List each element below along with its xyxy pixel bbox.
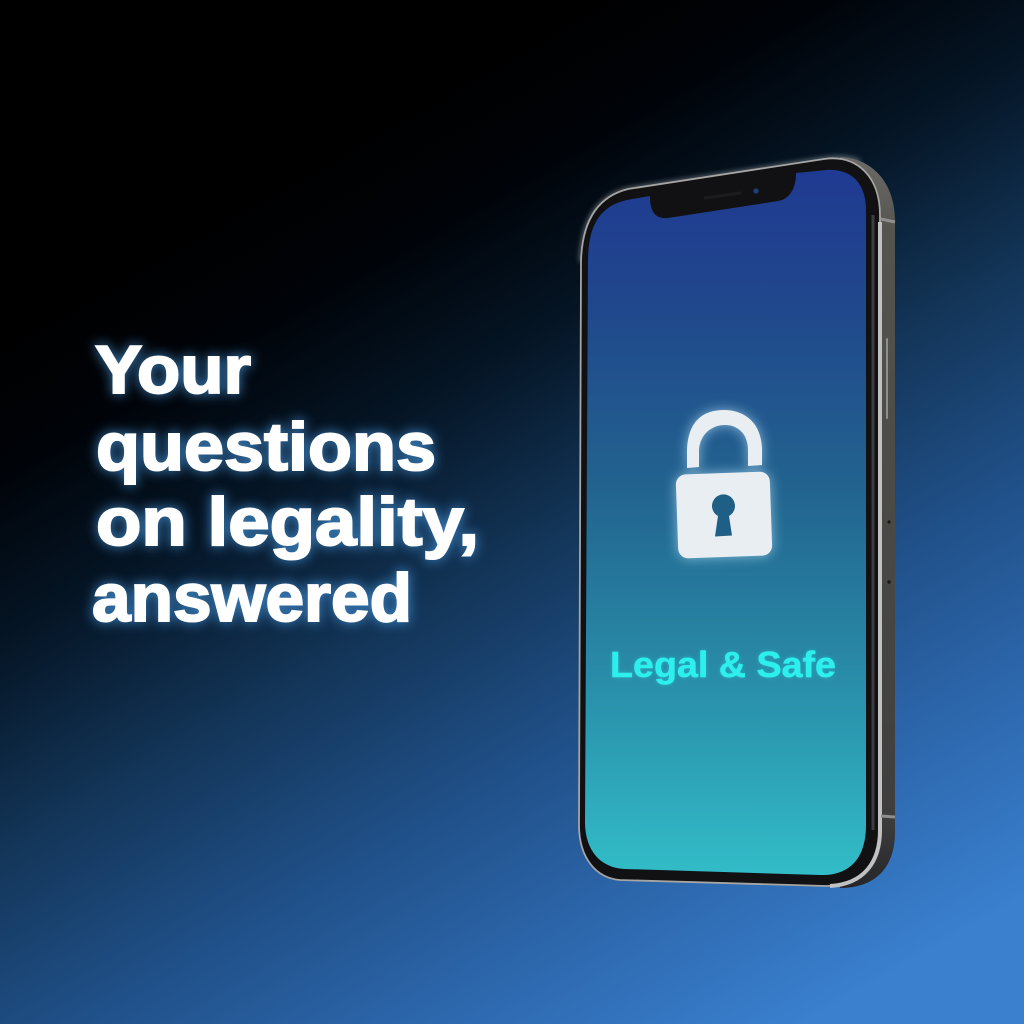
smartphone [579,157,895,888]
heading: Your [95,332,251,408]
phone front frame [579,158,880,886]
keyhole [712,494,735,536]
heading: questions [96,409,436,485]
lock icon [676,410,772,559]
side antenna bands [881,219,895,817]
heading glow: questions [96,409,436,485]
heading: answered [92,560,412,636]
phone side body [840,157,895,888]
heading glow [92,332,479,636]
heading glow: answered [92,560,412,636]
screen label glow: Legal & Safe [610,644,836,685]
inner bezel tone [872,215,874,830]
heading: on legality, [96,484,479,560]
side pinholes [887,520,891,584]
phone top rim glow [581,158,860,262]
lock icon glow [676,410,772,559]
heading glow: on legality, [96,484,479,560]
volume button [886,339,888,418]
speaker slit [705,193,740,198]
screen label: Legal & Safe [610,644,836,685]
screen [585,170,866,875]
camera [753,188,759,194]
shackle [687,410,762,468]
heading glow: Your [95,332,251,408]
bright right edge strip [830,222,880,886]
heading [92,332,479,636]
frame highlights [579,158,880,886]
lock body [676,471,772,559]
